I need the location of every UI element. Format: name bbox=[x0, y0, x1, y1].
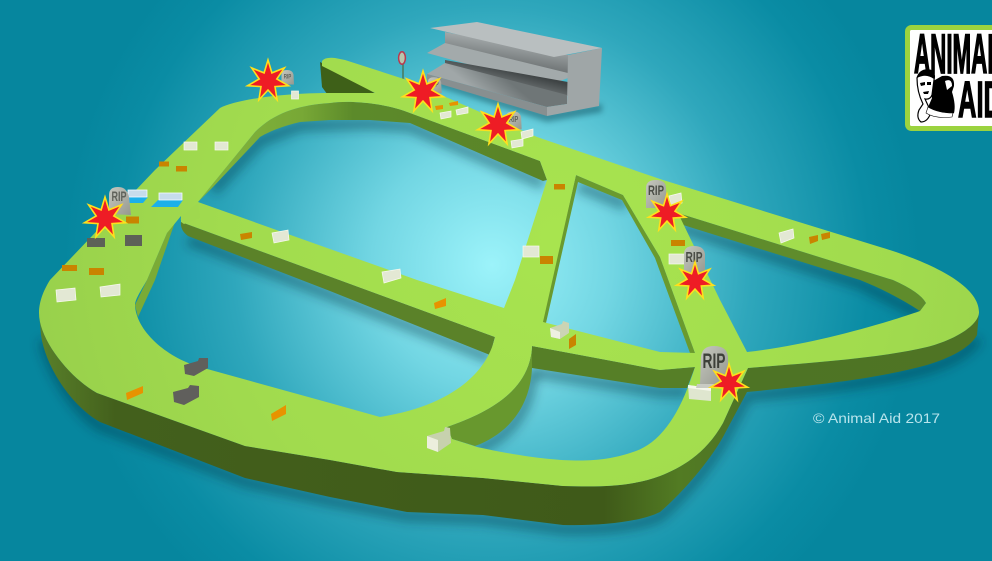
star markers bbox=[84, 60, 748, 400]
monkey eyes bbox=[920, 82, 931, 94]
cross link strips bbox=[542, 175, 695, 353]
gravestone 3: RIP bbox=[509, 115, 519, 124]
fence at last gravestone bbox=[688, 385, 711, 401]
water jumps bbox=[128, 190, 183, 207]
gravestone 1: RIP bbox=[284, 74, 292, 80]
star 6 bbox=[676, 262, 714, 298]
water jump two bbox=[151, 200, 183, 207]
star 3 bbox=[478, 104, 518, 144]
curved road side wall bbox=[447, 346, 532, 446]
inner left strip bbox=[135, 222, 175, 317]
white fences bbox=[56, 91, 794, 302]
west-east road end bbox=[181, 203, 200, 224]
northern inner wall bbox=[198, 102, 547, 202]
second monkey face bbox=[945, 80, 952, 90]
grandstand front face bbox=[427, 74, 547, 116]
logo monkey illustration bbox=[917, 70, 955, 122]
gravestone 2 bbox=[428, 77, 442, 93]
gravestone 5 bbox=[646, 180, 667, 208]
monkey body bbox=[926, 76, 955, 117]
logo frame bbox=[908, 28, 992, 128]
east-west road side wall bbox=[532, 346, 695, 388]
star 1 bbox=[248, 60, 288, 100]
winning post sign bbox=[399, 52, 405, 82]
water jump one bbox=[128, 197, 148, 203]
right loop side wall bbox=[678, 213, 926, 311]
gravestone 1 bbox=[282, 70, 294, 84]
logo bbox=[908, 22, 992, 128]
gravestone 7: RIP bbox=[702, 350, 726, 373]
grandstand upper back wall bbox=[445, 32, 568, 76]
orange hurdles bbox=[62, 101, 830, 421]
water fence one bbox=[128, 190, 147, 197]
gravestone 4 bbox=[109, 187, 131, 215]
west-east road side wall bbox=[181, 222, 495, 355]
grandstand shadow bbox=[430, 78, 602, 122]
grey fences bbox=[87, 235, 208, 405]
copyright: © Animal Aid 2017 bbox=[813, 410, 940, 426]
star 4 bbox=[84, 197, 126, 237]
gravestone 6 bbox=[684, 246, 705, 274]
monkey face bbox=[917, 70, 934, 122]
gravestone 6: RIP bbox=[686, 249, 702, 266]
water fence two bbox=[159, 193, 182, 200]
gravestone 3 bbox=[506, 111, 522, 129]
grandstand roof bbox=[430, 22, 602, 57]
track surface bbox=[39, 58, 979, 486]
star 2 bbox=[402, 71, 444, 111]
grandstand end wall bbox=[547, 48, 602, 116]
gravestone 2: RIP bbox=[430, 81, 439, 89]
outer side wall bbox=[39, 312, 979, 525]
grandstand upper tread bbox=[427, 43, 568, 86]
star 5 bbox=[648, 194, 686, 230]
racecourse track bbox=[39, 58, 979, 525]
gravestone 4: RIP bbox=[112, 188, 126, 204]
grandstand lower back wall bbox=[445, 60, 568, 96]
gravestone 7 bbox=[696, 346, 728, 388]
stub side wall bbox=[320, 62, 378, 98]
fence near east-west road bbox=[550, 321, 569, 339]
monkey arm bbox=[926, 107, 953, 118]
fence near curved road bbox=[427, 427, 451, 452]
grandstand bbox=[427, 22, 602, 122]
gravestone 5: RIP bbox=[648, 182, 664, 198]
monkey hair bbox=[917, 70, 934, 79]
track shadows bbox=[44, 124, 977, 529]
grandstand lower tread bbox=[427, 63, 567, 107]
star 7 bbox=[710, 364, 748, 400]
